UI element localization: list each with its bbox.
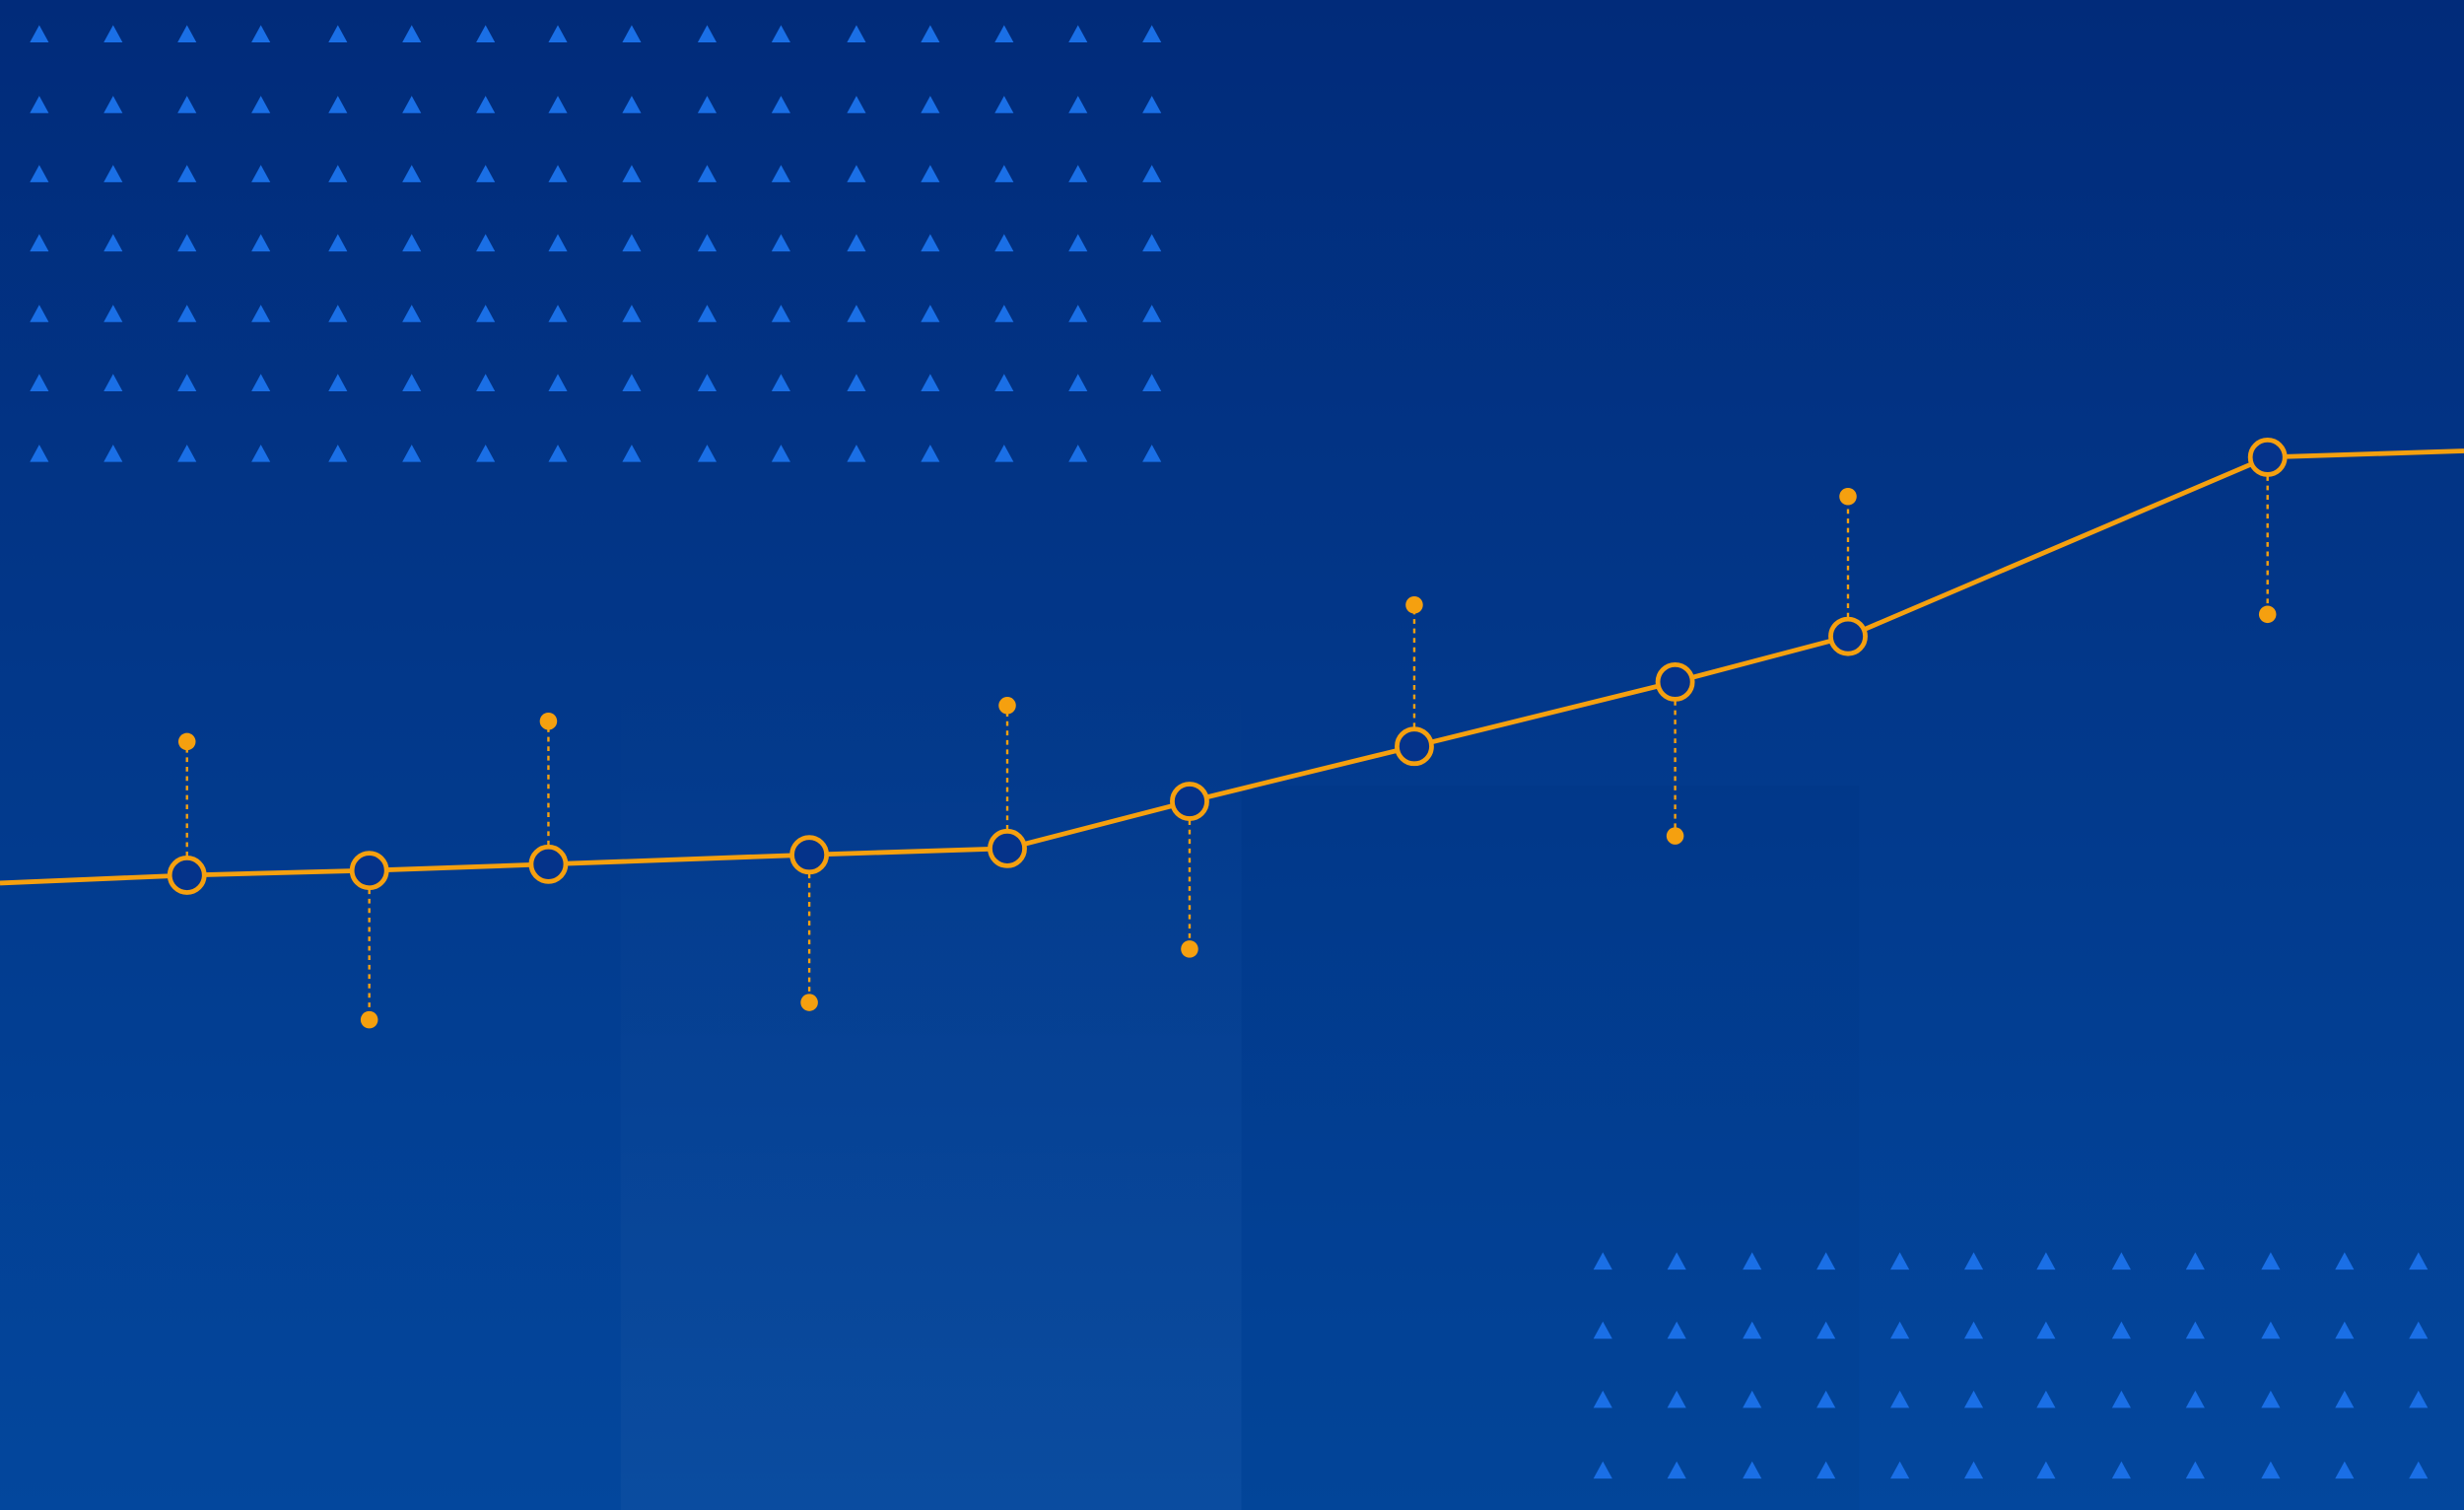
pattern: triangles bottom-right (1594, 1253, 2428, 1478)
chart: error stems (187, 457, 2268, 1020)
chart: stem end dots (178, 488, 2276, 1028)
chart: data point markers (170, 440, 2285, 892)
pattern: triangles top-left (30, 26, 1161, 462)
chart: trend line (0, 451, 2464, 883)
